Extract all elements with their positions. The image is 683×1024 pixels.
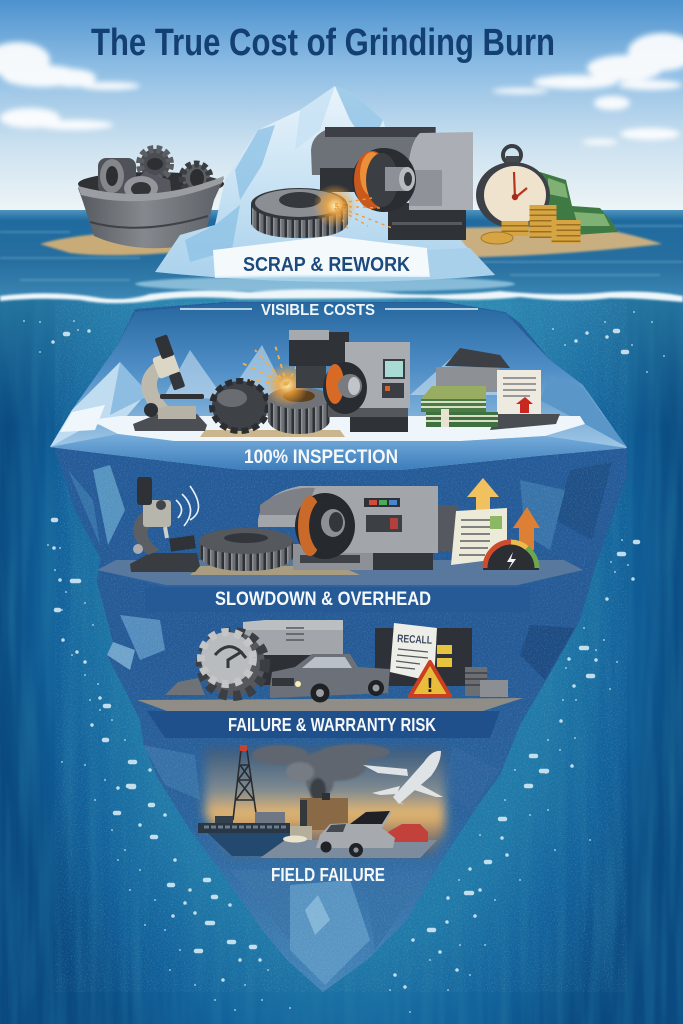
label: 100% inspection: 100% INSPECTION bbox=[244, 447, 398, 468]
bubbles right of the iceberg bbox=[390, 312, 664, 1012]
label: slowdown and overhead: SLOWDOWN & OVERHEAD bbox=[215, 589, 431, 610]
icon: yellow up arrow bbox=[467, 478, 499, 510]
icon: grinding machine with gear and sparks bbox=[251, 127, 473, 240]
icon: failed gear bbox=[165, 632, 265, 696]
sky background bbox=[0, 0, 683, 212]
cash stacks bbox=[421, 386, 498, 427]
ice facets bbox=[68, 462, 612, 985]
icon: cabinet, recall notice and warning bbox=[375, 623, 508, 697]
waterline foam bbox=[0, 289, 683, 303]
stopwatch bbox=[476, 146, 550, 228]
sand island right bbox=[440, 226, 662, 258]
icon: microscope with signal arcs bbox=[130, 477, 200, 572]
icon: microscope bbox=[133, 334, 207, 431]
bubbles left of the iceberg bbox=[24, 321, 290, 1010]
tier 1: 100% inspection ledge bbox=[50, 303, 627, 470]
icon: gauge bbox=[483, 542, 539, 570]
label: visible costs with rules: VISIBLE COSTS bbox=[261, 302, 375, 319]
icon: dock and refinery bbox=[198, 793, 348, 840]
icon: broken-down cars bbox=[283, 811, 428, 857]
label: failure and warranty risk: FAILURE & WARRANTY RISK bbox=[228, 715, 436, 735]
tier 2 label band bbox=[145, 587, 530, 612]
icon: airplane bbox=[363, 751, 443, 805]
tier 1 label band bbox=[50, 434, 627, 470]
sparks bbox=[240, 345, 309, 407]
stacked parts bbox=[465, 667, 508, 697]
icon: damaged pickup truck bbox=[270, 654, 390, 702]
icon: grinding machine bbox=[258, 486, 458, 570]
icon: equipment housing bbox=[243, 620, 343, 685]
tier 2: slowdown and overhead ledge bbox=[97, 477, 583, 612]
tier 4: field failure scene bbox=[198, 744, 445, 858]
coins bbox=[481, 205, 566, 244]
scrap gears bbox=[98, 149, 210, 200]
warning triangle: ! bbox=[427, 675, 433, 697]
water below surface bbox=[0, 297, 683, 1024]
icon: oil derrick bbox=[233, 745, 257, 820]
report bbox=[490, 370, 560, 430]
icon: bucket of scrapped gears bbox=[78, 149, 224, 248]
gear workpiece bbox=[251, 188, 348, 238]
iceberg above water bbox=[135, 86, 515, 292]
cash bbox=[540, 172, 618, 236]
sea surface bbox=[0, 210, 683, 298]
icon: stopwatch, coins and cash bbox=[476, 146, 618, 244]
tier 3: failure and warranty risk ledge bbox=[137, 620, 523, 738]
icon: burnt gears bbox=[212, 381, 330, 434]
label: field failure: FIELD FAILURE bbox=[271, 865, 385, 885]
recall document: RECALL bbox=[397, 633, 433, 647]
icon: document bbox=[451, 508, 507, 565]
icon: printer, cash and report bbox=[421, 348, 560, 430]
smoke plumes bbox=[252, 744, 390, 802]
label: scrap and rework: SCRAP & REWORK bbox=[243, 254, 410, 276]
sparks bbox=[313, 184, 392, 232]
sand island left bbox=[40, 230, 180, 255]
clouds bbox=[0, 33, 683, 145]
icon: grinding machine bbox=[289, 330, 410, 432]
icon: orange up arrow bbox=[513, 507, 540, 550]
bucket back wall bbox=[78, 172, 224, 196]
title: The True Cost of Grinding Burn bbox=[91, 22, 555, 64]
icon: gear bbox=[199, 528, 293, 571]
submerged iceberg bbox=[55, 302, 627, 992]
